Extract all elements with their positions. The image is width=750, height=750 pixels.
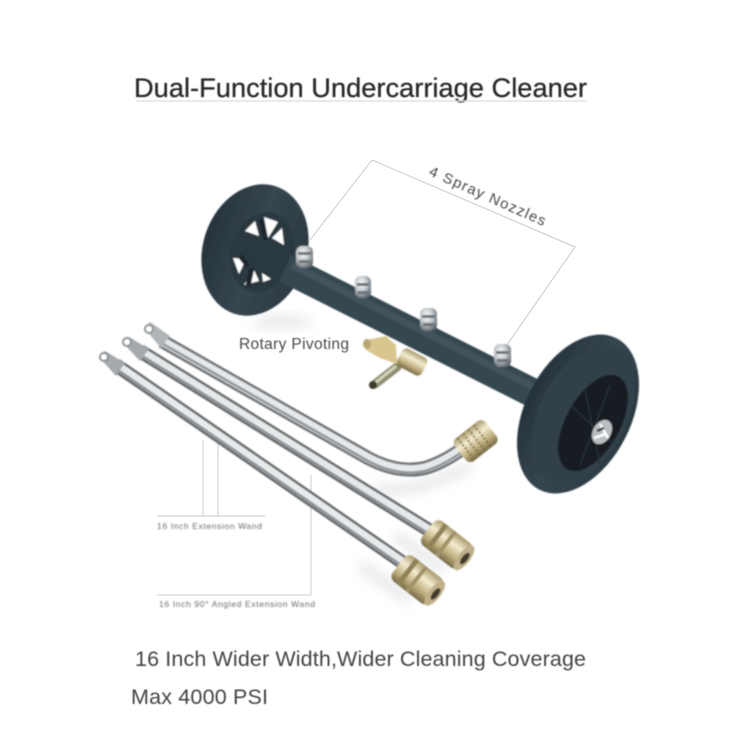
label: 16 inch angled extension wand: 16 Inch 90° Angled Extension Wand	[159, 599, 315, 609]
text: wider width: 16 Inch Wider Width,Wider Cleaning Coverage	[135, 647, 586, 671]
icon: spray nozzles	[296, 246, 511, 367]
icon: rotary pivoting fitting	[363, 336, 429, 389]
wand: straight front	[99, 351, 402, 565]
title: Dual-Function Undercarriage Cleaner	[134, 73, 587, 103]
wand: angled	[144, 322, 466, 473]
icon: brass couplers	[389, 418, 500, 610]
icon: left wheel	[185, 170, 325, 330]
undercarriage cleaner bar	[185, 170, 664, 514]
text: max psi: Max 4000 PSI	[131, 685, 268, 709]
icon: right wheel	[492, 314, 664, 514]
axle bar	[285, 265, 545, 399]
extension wands	[99, 322, 500, 610]
label: 16 inch extension wand: 16 Inch Extension Wand	[157, 521, 262, 531]
leader lines: spray nozzles	[310, 160, 575, 345]
leader lines: wands	[157, 440, 311, 595]
label: 4 spray nozzles: 4 Spray Nozzles	[426, 163, 548, 230]
label: rotary pivoting: Rotary Pivoting	[239, 336, 349, 353]
wand shadows	[360, 466, 470, 600]
wand: straight rear	[123, 337, 432, 535]
